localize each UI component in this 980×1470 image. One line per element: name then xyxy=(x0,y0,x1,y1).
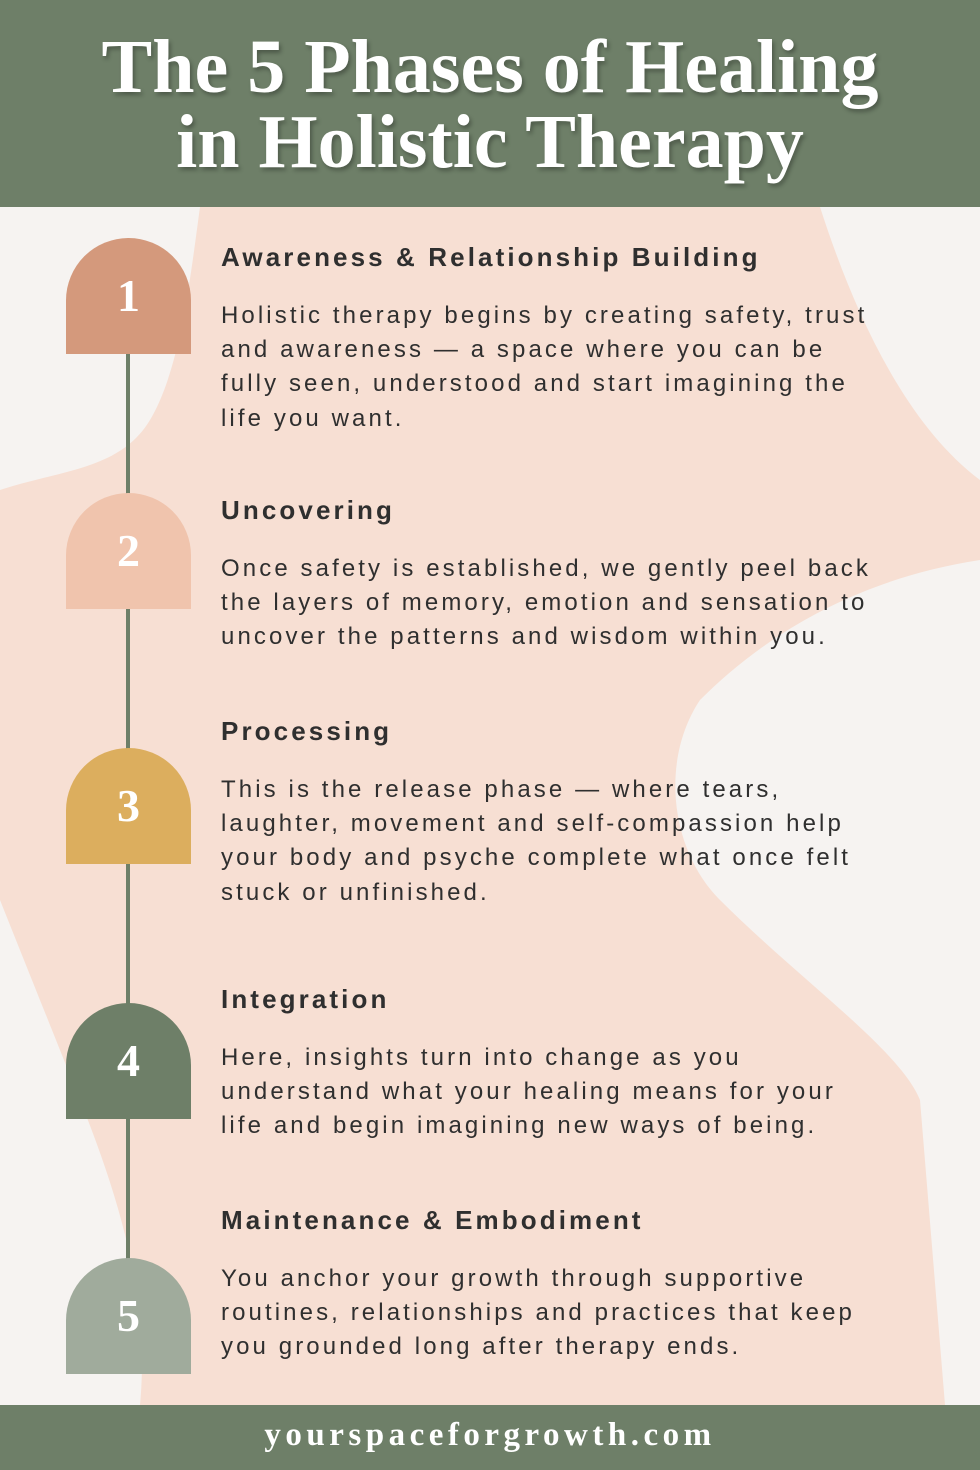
badge 3 xyxy=(66,748,191,864)
step 5: You anchor your growth through supportive xyxy=(221,1265,806,1292)
step 2: Once safety is established, we gently peel back xyxy=(221,555,871,582)
step 2: the layers of memory, emotion and sensation to xyxy=(221,589,867,616)
step 2: uncover the patterns and wisdom within you. xyxy=(221,623,828,650)
step 5: Maintenance & Embodiment xyxy=(221,1205,644,1235)
step 3: stuck or unfinished. xyxy=(221,879,490,906)
step 4: Here, insights turn into change as you xyxy=(221,1044,742,1071)
badge 4 xyxy=(66,1003,191,1119)
step 1: Holistic therapy begins by creating safety, trust xyxy=(221,302,867,329)
footer xyxy=(0,1405,980,1470)
badge 1: 1 xyxy=(117,270,140,321)
title: in Holistic Therapy xyxy=(176,100,804,184)
badge 5: 5 xyxy=(117,1290,140,1341)
title: The 5 Phases of Healing xyxy=(102,25,878,109)
step 5 xyxy=(221,1205,855,1360)
step 5: you grounded long after therapy ends. xyxy=(221,1333,741,1360)
step 4: Integration xyxy=(221,984,389,1014)
step 1: fully seen, understood and start imagining the xyxy=(221,370,848,397)
step 3 xyxy=(221,716,851,906)
badge 1 xyxy=(66,238,191,354)
badge 3: 3 xyxy=(117,780,140,831)
step 3: This is the release phase — where tears, xyxy=(221,776,781,803)
step 4: understand what your healing means for your xyxy=(221,1078,836,1105)
footer url: yourspaceforgrowth.com xyxy=(264,1417,716,1453)
step 2 xyxy=(221,495,871,650)
step 3: laughter, movement and self-compassion help xyxy=(221,810,844,837)
step 1 xyxy=(221,242,867,432)
step 3: your body and psyche complete what once felt xyxy=(221,844,851,871)
timeline line xyxy=(126,300,130,1330)
badge 2: 2 xyxy=(117,525,140,576)
step 1: and awareness — a space where you can be xyxy=(221,336,825,363)
step 4: life and begin imagining new ways of being. xyxy=(221,1112,817,1139)
step 3: Processing xyxy=(221,716,392,746)
badge 5 xyxy=(66,1258,191,1374)
header xyxy=(0,0,980,207)
badge 2 xyxy=(66,493,191,609)
step 1: Awareness & Relationship Building xyxy=(221,242,761,272)
badge 4: 4 xyxy=(117,1035,140,1086)
step 4 xyxy=(221,984,836,1139)
title xyxy=(102,25,882,188)
step 2: Uncovering xyxy=(221,495,395,525)
step 5: routines, relationships and practices that keep xyxy=(221,1299,855,1326)
step 1: life you want. xyxy=(221,405,404,432)
